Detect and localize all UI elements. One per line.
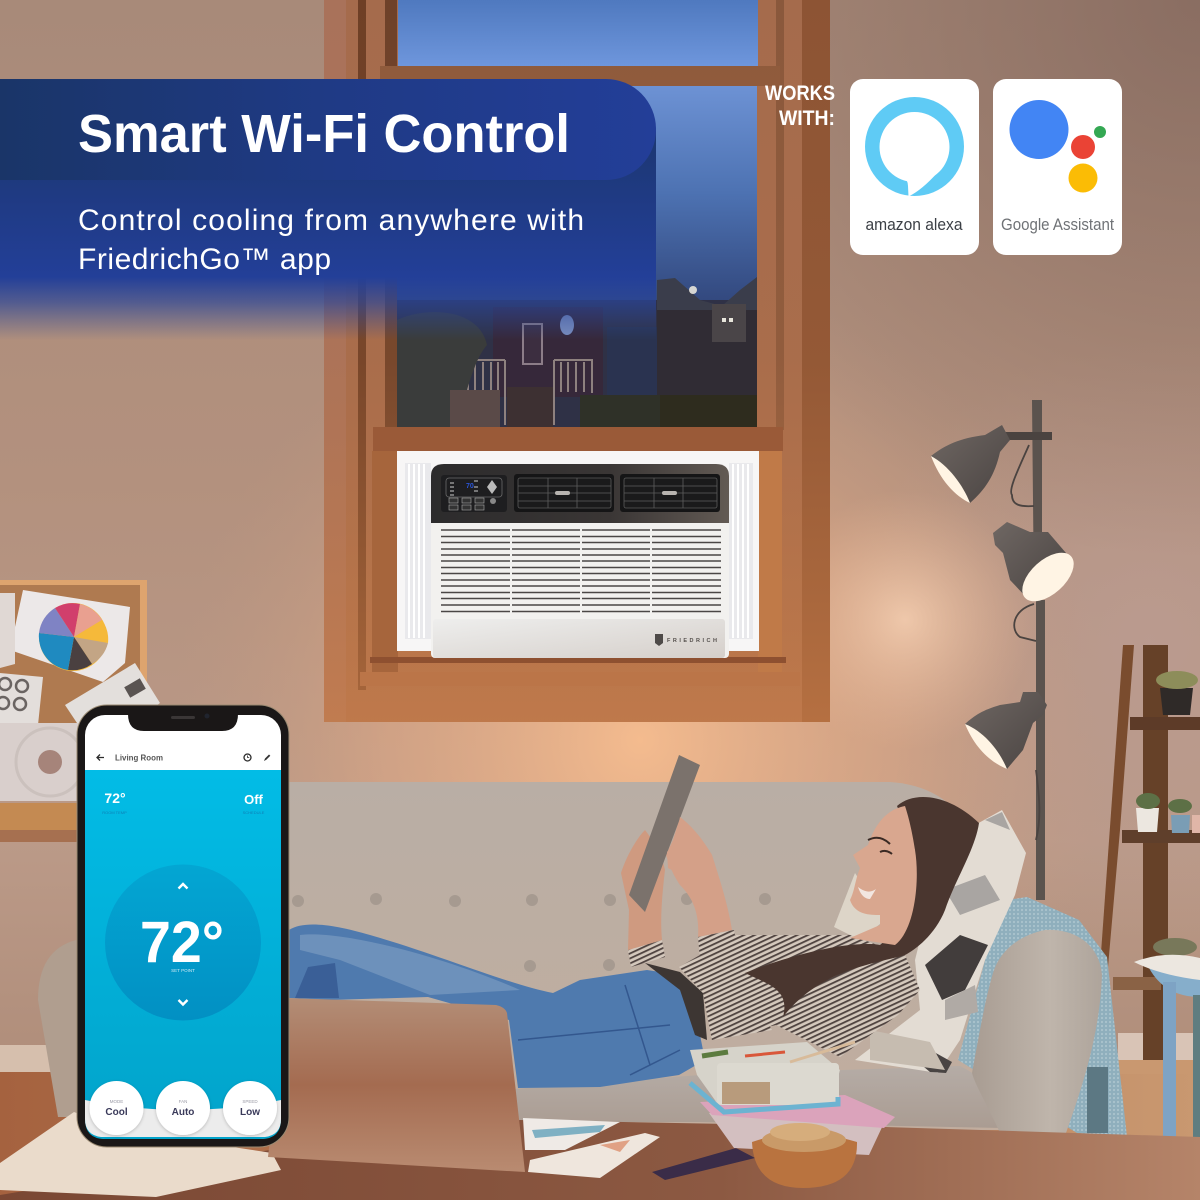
title: Smart Wi-Fi Control (78, 104, 570, 164)
temperature dial: 72° (140, 910, 224, 975)
google wordmark: Google Assistant (1001, 215, 1114, 234)
left forearm and hand (621, 830, 665, 950)
shelving unit (1100, 645, 1200, 1060)
belt (645, 963, 707, 1040)
vent slats (441, 530, 721, 612)
mounting panel (397, 451, 759, 651)
baseboard and floor (0, 1033, 1200, 1200)
upper box (690, 1042, 840, 1103)
fan button: FAN (179, 1099, 187, 1104)
right forearm (666, 817, 732, 937)
floor lamp (931, 400, 1082, 900)
face (850, 806, 917, 945)
speed button: SPEED (242, 1099, 258, 1104)
middle lamp (993, 522, 1082, 610)
upper glass (398, 0, 758, 66)
left sleeve (628, 940, 665, 967)
phone body (77, 705, 289, 1147)
fan button (156, 1081, 210, 1135)
seat cushion (500, 1066, 1000, 1128)
sleeve (698, 930, 772, 1040)
alexa wordmark: amazon alexa (866, 215, 963, 234)
header: Living Room (115, 752, 163, 762)
pillow (834, 810, 1026, 1073)
hair (745, 797, 979, 1017)
schedule: SCHEDULE (243, 810, 265, 815)
room temp: 72° (104, 790, 126, 806)
food containers (690, 1042, 895, 1155)
lower box (709, 1113, 884, 1155)
tablet (629, 755, 700, 912)
blue heading panel (0, 130, 656, 340)
window sill (373, 427, 783, 451)
right louver (620, 474, 720, 512)
room temp (102, 790, 127, 815)
window frame (324, 0, 830, 722)
air conditioner: 70 (466, 483, 474, 490)
subtitle (78, 204, 584, 276)
tufting buttons (292, 893, 771, 972)
laptop (268, 998, 525, 1172)
works with label: WITH: (779, 107, 835, 130)
side table (1134, 955, 1200, 1145)
unit body (431, 514, 729, 658)
sofa (38, 782, 1000, 1130)
woman (289, 797, 979, 1088)
fabric rug (0, 1112, 281, 1197)
sweater (679, 935, 920, 1057)
nut bowl (752, 1123, 857, 1188)
circles sheet (0, 673, 43, 725)
top lamp (931, 425, 1052, 503)
air conditioner (397, 451, 759, 658)
fan button: Auto (172, 1107, 194, 1118)
right sofa arm (972, 930, 1102, 1133)
google assistant card (993, 79, 1122, 255)
potted plants (1136, 671, 1200, 956)
schedule: Off (244, 792, 264, 807)
subtitle: Control cooling from anywhere with (78, 204, 584, 237)
header (97, 752, 270, 762)
air conditioner: FRIEDRICH (667, 638, 717, 644)
mode button (90, 1081, 144, 1135)
mode button: MODE (110, 1099, 123, 1104)
front house (493, 307, 603, 397)
papers (523, 1118, 660, 1178)
tree (397, 312, 487, 427)
temperature dial: SET POINT (171, 968, 195, 973)
jeans (289, 925, 705, 1088)
screen (85, 715, 281, 1139)
amazon alexa card (850, 79, 979, 255)
icon: google assistant dots (1010, 100, 1106, 192)
left note (0, 593, 15, 668)
subtitle: FriedrichGo™ app (78, 243, 331, 276)
notch (128, 714, 238, 731)
schedule (243, 792, 265, 815)
icon sheet (65, 663, 160, 750)
room temp: ROOM TEMP (102, 810, 127, 815)
right hand over tablet (667, 817, 712, 880)
wheel sheet (0, 723, 84, 801)
wooden ledge (0, 803, 100, 842)
right houses (657, 277, 757, 427)
temperature dial (105, 864, 261, 1020)
works with label (765, 82, 835, 130)
base panel (433, 619, 725, 658)
control panel (441, 475, 507, 512)
phone on table (652, 1148, 755, 1180)
smile (858, 887, 876, 899)
pie chart poster (10, 590, 130, 682)
title banner (0, 79, 656, 180)
window (324, 0, 830, 722)
speed button (223, 1081, 277, 1135)
eye and brow (868, 838, 892, 854)
smartphone (77, 705, 289, 1147)
lower lamp (965, 692, 1047, 769)
speed button: Low (240, 1107, 260, 1118)
icon: alexa ring (865, 97, 964, 196)
bottom tray (85, 1100, 281, 1137)
lower glass: evening view (397, 86, 757, 428)
pole (1032, 400, 1045, 900)
sofa back (280, 782, 1000, 1130)
works with label: WORKS (765, 82, 835, 105)
cables (1011, 445, 1039, 840)
left arm (38, 940, 120, 1117)
throw blanket (958, 897, 1127, 1137)
coffee table (0, 1120, 1200, 1200)
corkboard (0, 580, 160, 750)
brand logo (655, 634, 663, 646)
mode button: Cool (105, 1107, 128, 1118)
left louver (514, 474, 614, 512)
